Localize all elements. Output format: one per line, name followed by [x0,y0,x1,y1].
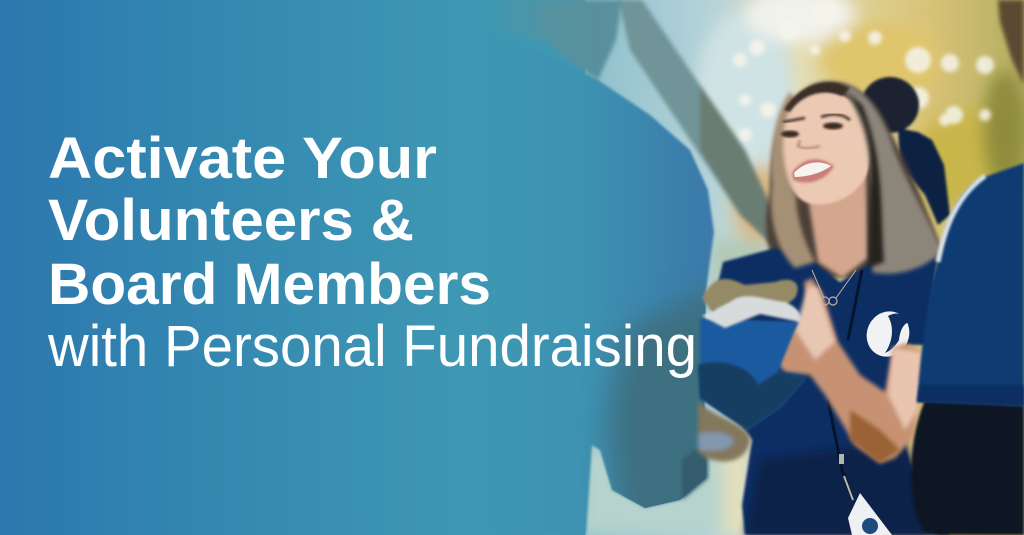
lanyard [828,270,862,497]
dark top-right branch [998,0,1024,85]
hair strands left [771,92,815,268]
face [776,91,871,204]
lower hand of man with glove [698,402,750,461]
hair top [784,83,850,112]
heading line 2: Volunteers & [48,188,414,253]
heading line 3: Board Members [48,252,491,317]
man's head blurred at top [490,0,622,80]
neck [806,170,868,278]
shirt shadow [745,440,930,535]
blue garment in hand [700,318,806,430]
navy t-shirt [712,248,950,535]
forearm and hand [776,278,923,463]
eyebrows and eyes [783,114,850,122]
globe logo [859,304,917,364]
subheading line: with Personal Fundraising [47,314,697,379]
heading line 1: Activate Your [48,126,437,191]
background person in dark clothing [861,77,950,225]
hair back [766,81,940,282]
work gloves [702,279,798,310]
hair strands right [838,82,941,274]
id badge [848,493,892,535]
woman smiling in navy shirt [698,81,950,535]
foreground man in blue shirt [585,72,716,535]
photo background: autumn trees [560,0,1024,535]
necklace [812,270,856,298]
title [47,126,697,379]
gradient panel [0,0,585,535]
right person in navy shirt [911,163,1024,535]
nose [798,140,820,148]
smile [792,159,834,183]
tree trunk [618,0,780,245]
